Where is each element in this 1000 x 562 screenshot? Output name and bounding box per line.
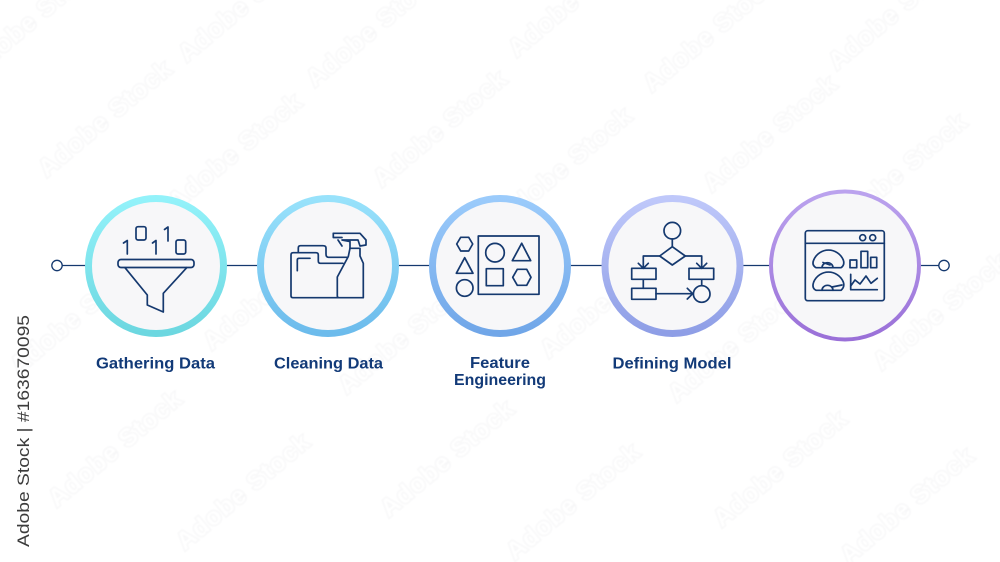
watermark pattern: Adobe Stock (663, 280, 807, 408)
icon: flowchart (632, 222, 714, 302)
watermark pattern: Adobe Stock (375, 395, 519, 523)
watermark pattern: Adobe Stock (828, 108, 972, 236)
step 3: feature engineering (432, 198, 568, 389)
watermark pattern: Adobe Stock (198, 228, 342, 356)
watermark pattern: Adobe Stock (5, 252, 149, 380)
ring 3 (432, 198, 568, 334)
ring 5 (771, 192, 919, 340)
label: Defining Model (612, 356, 732, 372)
watermark pattern: Adobe Stock (43, 385, 187, 513)
label: Feature (470, 355, 530, 372)
watermark pattern: Adobe Stock (368, 65, 512, 193)
step 3: feature engineering: Engineering (454, 372, 546, 389)
step 1: gathering data (88, 198, 224, 372)
watermark pattern: Adobe Stock (535, 236, 679, 364)
label: Cleaning Data (274, 356, 383, 372)
watermark pattern: Adobe Stock (708, 405, 852, 533)
watermark pattern: Adobe Stock (333, 272, 477, 400)
timeline connector (52, 260, 949, 271)
watermark pattern: Adobe Stock (501, 438, 645, 562)
label: Gathering Data (96, 356, 215, 372)
ring 2 (260, 198, 396, 334)
icon: shapes sorting (456, 236, 539, 296)
step 5: dashboard (771, 192, 919, 340)
watermark pattern: Adobe Stock (698, 70, 842, 198)
watermark pattern: Adobe Stock (163, 88, 307, 216)
step 4: defining model (605, 198, 740, 372)
watermark pattern: Adobe Stock (493, 102, 637, 230)
ring 4 (605, 198, 740, 334)
ring 1 (88, 198, 224, 334)
stock credit: Adobe Stock | #163670095 (14, 315, 33, 547)
icon: dashboard window (805, 231, 884, 301)
icon: funnel with binary digits (118, 227, 194, 312)
step 2: cleaning data (260, 198, 396, 372)
watermark pattern: Adobe Stock (33, 55, 177, 183)
icon: folder and spray bottle (291, 233, 366, 298)
watermark pattern: Adobe Stock (171, 428, 315, 556)
